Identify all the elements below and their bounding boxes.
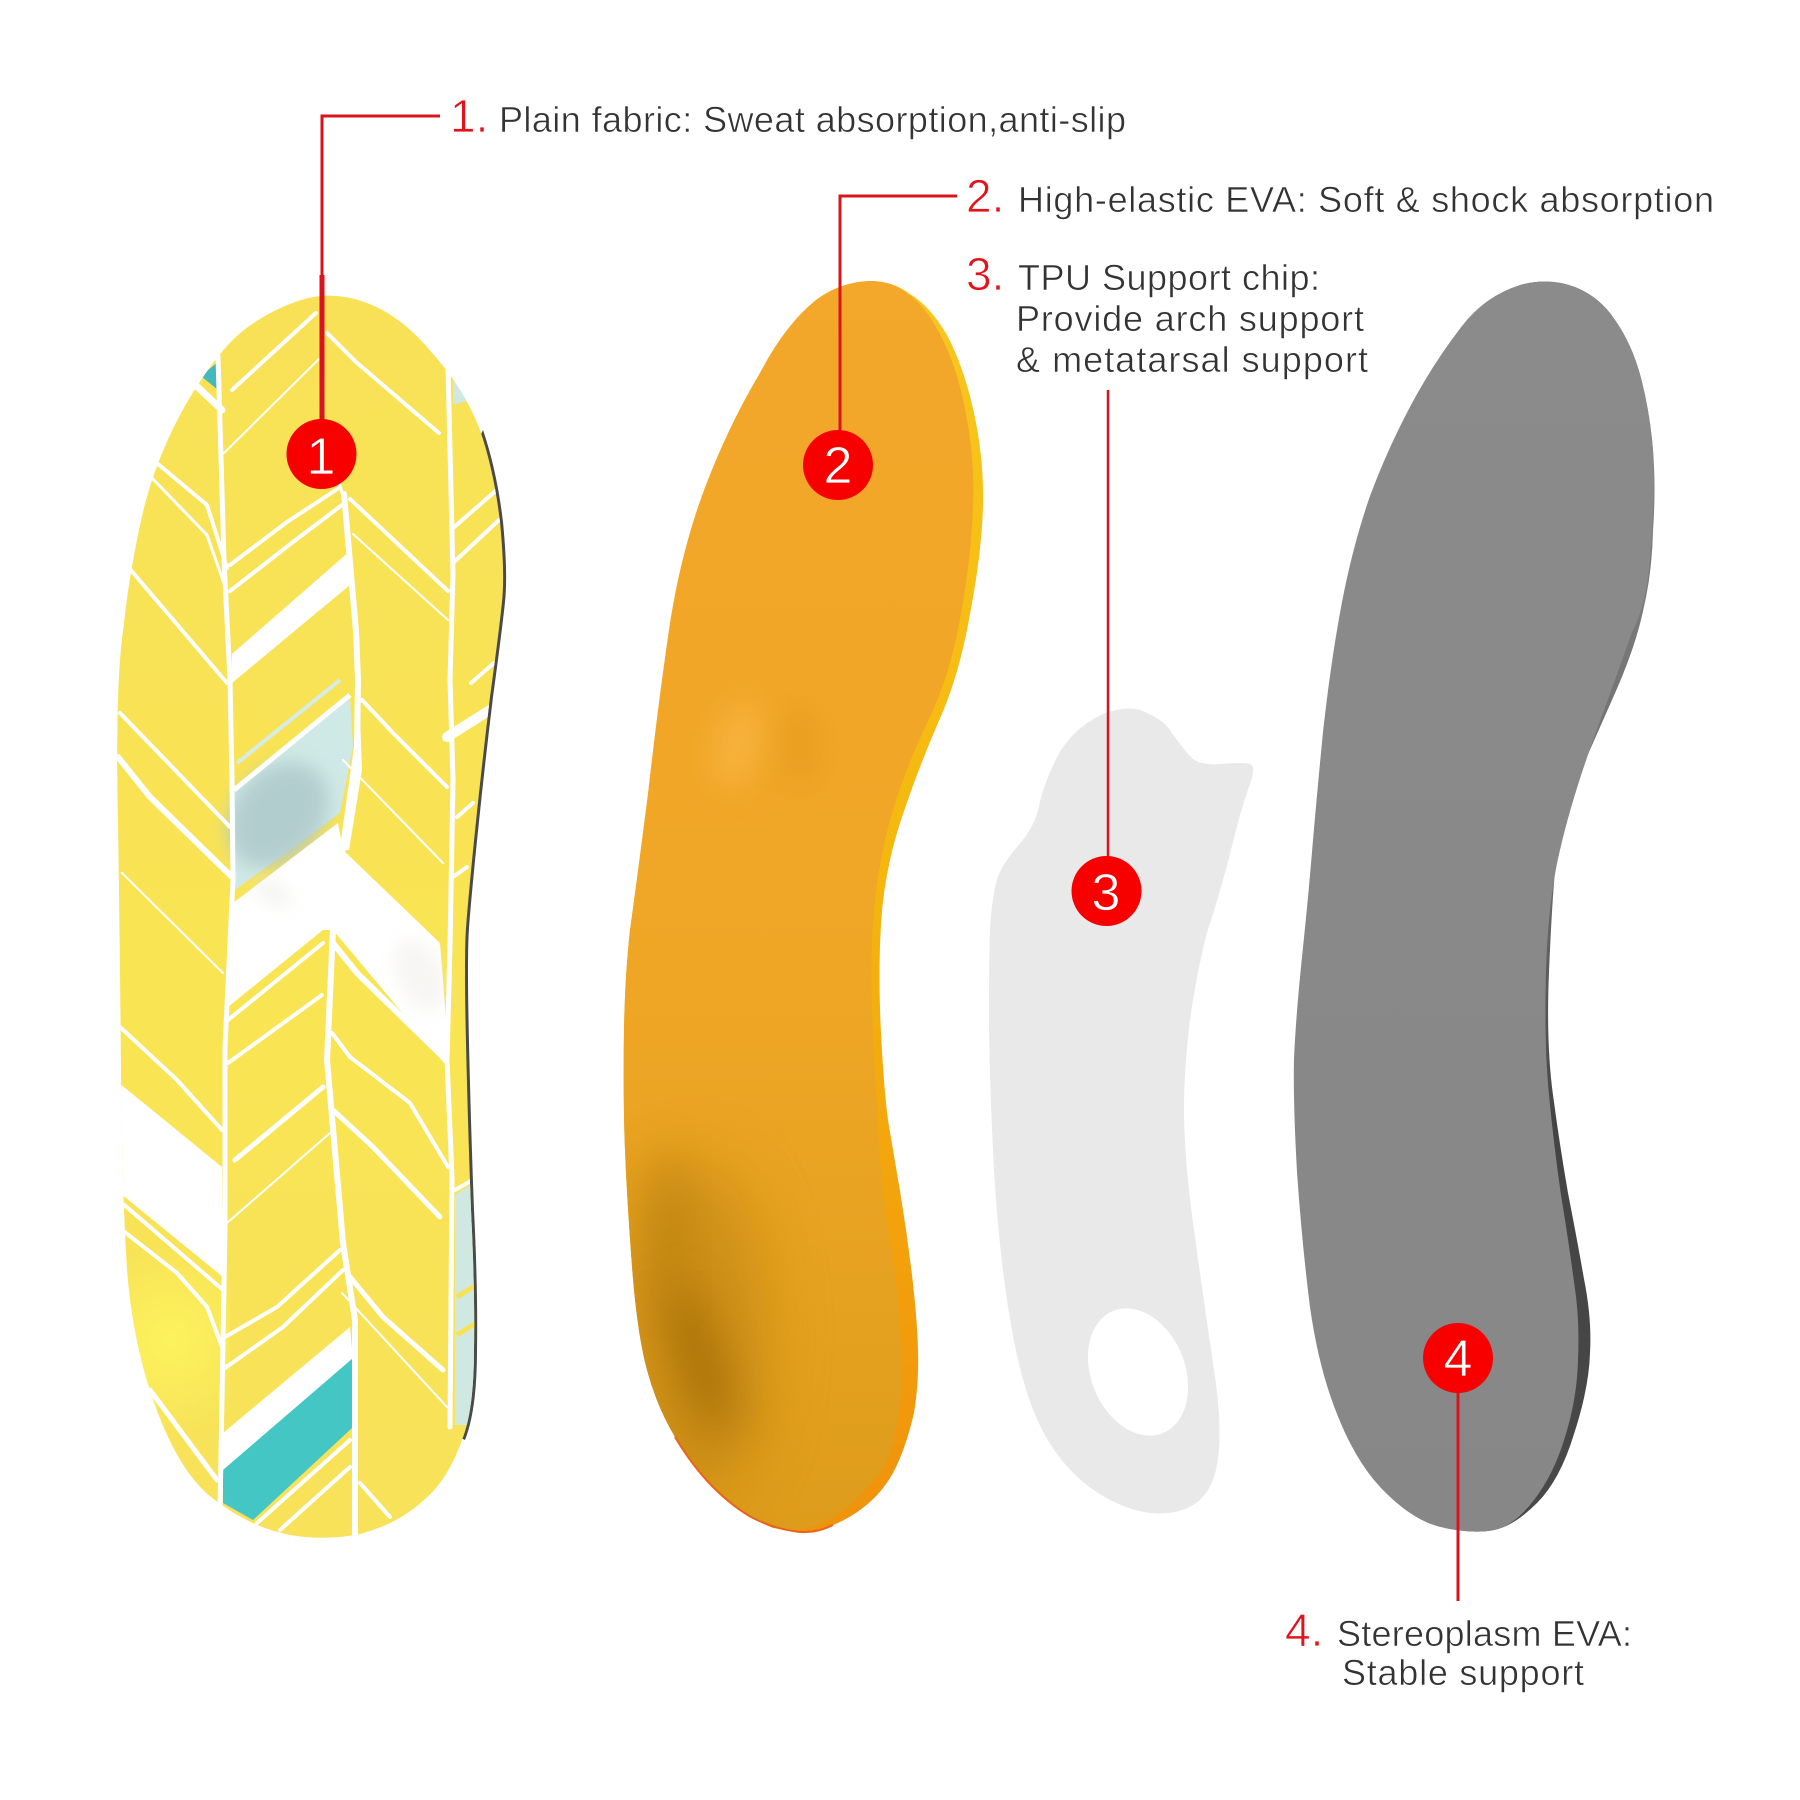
insole layer 4: grey stereoplasm EVA (1294, 281, 1654, 1532)
label 2: high-elastic EVA: High-elastic EVA: Soft & shock absorption (1018, 179, 1714, 220)
insole layer 3: white TPU support chip (989, 708, 1253, 1514)
callout 2: leader line and marker: 2 (824, 437, 852, 495)
label 3: TPU support chip: Provide arch support (1016, 298, 1364, 339)
label 4: stereoplasm EVA (1285, 1604, 1632, 1693)
label 4: stereoplasm EVA: Stable support (1342, 1652, 1584, 1693)
label 3: TPU support chip: & metatarsal support (1016, 339, 1368, 380)
insole layer 1: patterned fabric (100, 280, 520, 1550)
label 3: TPU support chip: 3. (966, 248, 1004, 300)
label 4: stereoplasm EVA: 4. (1285, 1604, 1323, 1656)
infographic canvas (117, 100, 1712, 1692)
arch cut-out hole (1070, 1293, 1206, 1451)
callout 3: leader line and marker (1072, 390, 1142, 926)
label 4: stereoplasm EVA: Stereoplasm EVA: (1337, 1613, 1632, 1654)
callout 3: leader line and marker: 3 (1092, 864, 1120, 922)
callout 4: leader line and marker: 4 (1444, 1330, 1472, 1388)
label 1: plain fabric: 1. (450, 90, 488, 142)
callout 1: leader line and marker: 1 (307, 428, 335, 486)
insole layer 2: orange high-elastic EVA (624, 281, 984, 1534)
callout 2: leader line and marker (803, 196, 957, 500)
label 1: plain fabric: Plain fabric: Sweat absorption,anti-slip (499, 99, 1126, 140)
label 2: high-elastic EVA: 2. (966, 170, 1004, 222)
label 3: TPU support chip (966, 248, 1368, 380)
label 3: TPU support chip: TPU Support chip: (1018, 257, 1320, 298)
callout 4: leader line and marker (1423, 1323, 1493, 1601)
callout 1: leader line and marker (286, 116, 440, 489)
